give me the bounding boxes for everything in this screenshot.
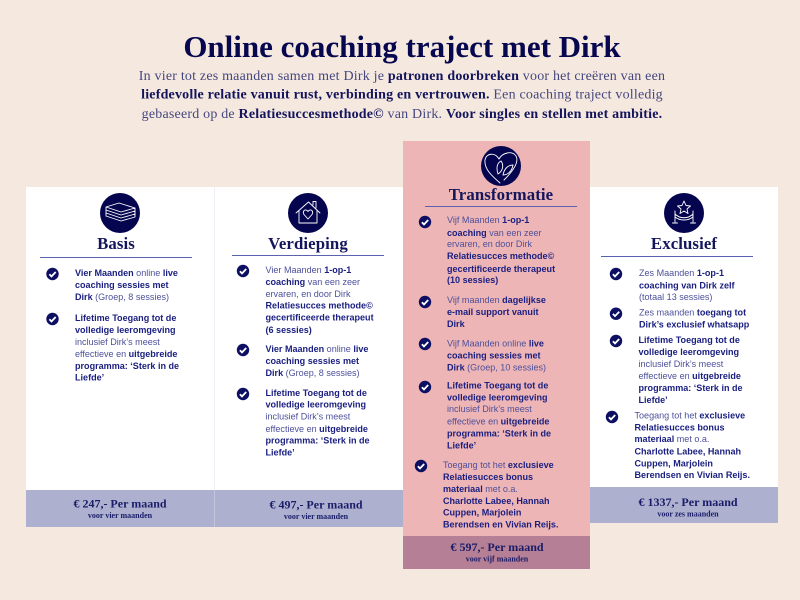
text: bonus materiaal xyxy=(443,460,558,530)
text: 1-op-1 coaching: coaching van een zeer xyxy=(266,277,360,287)
price band: Basis: voor vier maanden xyxy=(88,511,153,520)
text: whatsapp xyxy=(639,308,750,330)
icon: house with heart xyxy=(288,193,328,233)
text: lifetime toegang: Liefde’ xyxy=(447,440,476,450)
icon: check xyxy=(415,460,427,472)
text: lifetime toegang xyxy=(447,380,551,450)
text: bonus materiaal: Berendsen en Vivian Reijs. xyxy=(634,470,750,480)
text: bonus materiaal: Cuppen, Marjolein xyxy=(634,458,713,468)
text: lifetime toegang: Lifetime Toegang tot de xyxy=(638,335,740,345)
icon: stack of layers xyxy=(100,193,140,233)
icon: check xyxy=(46,268,59,280)
text: 1-op-1 coaching: ervaren, en door Dirk xyxy=(266,289,351,299)
text: lifetime toegang: inclusief Dirk’s meest xyxy=(638,359,724,369)
text: 1-op-1 coaching: Relatiesucces methode© xyxy=(447,251,555,261)
text: 1-op-1 coaching: (totaal 13 sessies) xyxy=(639,292,712,302)
text: lifetime toegang: volledige leeromgeving xyxy=(75,325,176,335)
text: bonus materiaal: Cuppen, Marjolein xyxy=(443,508,521,518)
text: lifetime toegang: Liefde’ xyxy=(266,448,295,458)
text: lifetime toegang xyxy=(75,313,179,382)
price band: Verdieping xyxy=(214,490,403,527)
text: 1-op-1 coaching: coaching van Dirk zelf xyxy=(639,280,736,290)
icon: check xyxy=(606,411,618,423)
text: bonus materiaal: Relatiesucces bonus xyxy=(634,422,725,432)
text: live coaching: coaching sessies met xyxy=(75,280,169,290)
price band: Transformatie xyxy=(403,536,590,569)
text: 1-op-1 coaching xyxy=(266,265,374,335)
text: lifetime toegang: Liefde’ xyxy=(75,372,104,382)
icon: check xyxy=(46,313,59,325)
icon: check xyxy=(419,381,431,393)
intro text xyxy=(139,69,665,122)
text: lifetime toegang: effectieve en uitgebreide xyxy=(75,349,177,359)
text: live coaching: coaching sessies met xyxy=(266,356,359,366)
text: 1-op-1 coaching: Relatiesucces methode© xyxy=(266,300,373,310)
text: 1-op-1 coaching: Zes Maanden 1-op-1 xyxy=(639,268,724,278)
text: lifetime toegang: Lifetime Toegang tot de xyxy=(266,388,367,398)
text: live coaching xyxy=(266,344,368,378)
price band: Basis: € 247,- Per maand xyxy=(73,496,167,510)
text: 1-op-1 coaching xyxy=(639,268,736,302)
intro text: gebaseerd op de Relatiesuccesmethode© van Dirk. Voor singles en stellen met ambitie. xyxy=(142,107,662,122)
text: live coaching: Vijf Maanden online live xyxy=(447,339,544,349)
text: lifetime toegang: volledige leeromgeving xyxy=(638,347,739,357)
price band: Exclusief: € 1337,- Per maand xyxy=(638,495,738,509)
price band: Exclusief: voor zes maanden xyxy=(657,510,719,518)
panel: Verdieping xyxy=(214,187,403,527)
text: lifetime toegang: Liefde’ xyxy=(638,395,668,405)
icon: check xyxy=(419,216,431,228)
text: bonus materiaal: Toegang tot het exclusieve xyxy=(634,410,745,420)
text: lifetime toegang xyxy=(638,335,743,405)
text: bonus materiaal xyxy=(634,410,750,480)
text: bonus materiaal: Toegang tot het exclusieve xyxy=(443,460,554,470)
icon: check xyxy=(610,335,622,347)
text: 1-op-1 coaching xyxy=(447,215,555,285)
text: live coaching: Dirk (Groep, 8 sessies) xyxy=(75,292,169,302)
text: whatsapp: Dirk’s exclusief whatsapp xyxy=(639,320,750,330)
text: bonus materiaal: Berendsen en Vivian Reijs. xyxy=(443,520,558,530)
text: 1-op-1 coaching: coaching van een zeer xyxy=(447,228,542,238)
text: live coaching: Vier Maanden online live xyxy=(75,268,178,278)
icon: check xyxy=(237,388,249,400)
icon: check xyxy=(610,308,622,320)
text: lifetime toegang: effectieve en uitgebreide xyxy=(266,424,368,434)
text: e-mail support xyxy=(447,295,546,329)
text: bonus materiaal: Charlotte Labee, Hannah xyxy=(443,496,550,506)
price band: Verdieping: voor vier maanden xyxy=(284,512,349,521)
text: 1-op-1 coaching: (10 sessies) xyxy=(447,275,498,285)
text: e-mail support: Dirk xyxy=(447,319,466,329)
text: lifetime toegang: effectieve en uitgebreide xyxy=(447,416,549,426)
text: lifetime toegang: programma: ‘Sterk in de xyxy=(266,436,370,446)
text: whatsapp: Zes maanden toegang tot xyxy=(639,308,746,318)
intro text: liefdevolle relatie vanuit rust, verbinding en vertrouwen. Een coaching traject volledig xyxy=(141,88,663,102)
text: bonus materiaal: Relatiesucces bonus xyxy=(443,472,533,482)
price band: Basis xyxy=(26,490,214,527)
text: lifetime toegang: volledige leeromgeving xyxy=(447,392,548,402)
heading: Exclusief: Exclusief xyxy=(651,234,717,253)
text: lifetime toegang xyxy=(266,388,370,458)
text: live coaching: Vier Maanden online live xyxy=(266,344,368,354)
heading: Verdieping: Verdieping xyxy=(268,234,348,253)
panel: Transformatie xyxy=(403,141,590,569)
text: 1-op-1 coaching: Vier Maanden 1-op-1 xyxy=(266,265,351,275)
icon: check xyxy=(610,268,622,280)
text: bonus materiaal: materiaal met o.a. xyxy=(443,484,518,494)
text: lifetime toegang: Lifetime Toegang tot de xyxy=(447,380,548,390)
price band: Transformatie: € 597,- Per maand xyxy=(450,540,544,554)
text: lifetime toegang: effectieve en uitgebreide xyxy=(638,371,741,381)
text: bonus materiaal: Charlotte Labee, Hannah xyxy=(634,446,741,456)
text: bonus materiaal: materiaal met o.a. xyxy=(634,434,709,444)
price band: Exclusief xyxy=(590,487,778,523)
text: 1-op-1 coaching: Vijf Maanden 1-op-1 xyxy=(447,215,529,225)
icon: check xyxy=(237,344,249,356)
heading: Transformatie: Transformatie xyxy=(449,185,554,204)
icon: check xyxy=(419,338,431,350)
text: 1-op-1 coaching: ervaren, en door Dirk xyxy=(447,239,532,249)
text: 1-op-1 coaching: gecertificeerde therapeut xyxy=(447,264,555,274)
price band: Transformatie: voor vijf maanden xyxy=(466,554,529,564)
panel: Basis xyxy=(26,187,214,527)
text: live coaching xyxy=(75,268,178,302)
text: lifetime toegang: inclusief Dirk’s meest xyxy=(447,404,532,414)
price band: Verdieping: € 497,- Per maand xyxy=(269,498,363,512)
text: lifetime toegang: inclusief Dirk’s meest xyxy=(75,337,160,347)
text: 1-op-1 coaching: (6 sessies) xyxy=(266,325,312,335)
text: 1-op-1 coaching: gecertificeerde therapeut xyxy=(266,312,374,322)
text: e-mail support: Vijf maanden dagelijkse xyxy=(447,295,546,305)
panel: Exclusief xyxy=(590,187,778,523)
icon: star with rope barrier xyxy=(664,193,704,233)
text: lifetime toegang: programma: ‘Sterk in de xyxy=(638,383,743,393)
intro text: In vier tot zes maanden samen met Dirk je patronen doorbreken voor het creëren van een xyxy=(139,69,665,84)
text: lifetime toegang: inclusief Dirk’s meest xyxy=(266,412,351,422)
icon: check xyxy=(419,296,431,308)
text: lifetime toegang: volledige leeromgeving xyxy=(266,400,366,410)
text: live coaching xyxy=(447,339,546,372)
text: lifetime toegang: programma: ‘Sterk in de xyxy=(75,361,179,371)
text: live coaching: Dirk (Groep, 8 sessies) xyxy=(266,368,360,378)
heading: Basis: Basis xyxy=(97,234,135,253)
text: live coaching: Dirk (Groep, 10 sessies) xyxy=(447,362,546,372)
icon: heart with leaf xyxy=(481,146,521,186)
title: Online coaching traject met Dirk xyxy=(183,29,621,64)
text: live coaching: coaching sessies met xyxy=(447,350,541,360)
icon: check xyxy=(237,265,249,277)
text: e-mail support: e-mail support vanuit xyxy=(447,307,538,317)
text: lifetime toegang: Lifetime Toegang tot de xyxy=(75,313,176,323)
text: lifetime toegang: programma: ‘Sterk in de xyxy=(447,428,551,438)
